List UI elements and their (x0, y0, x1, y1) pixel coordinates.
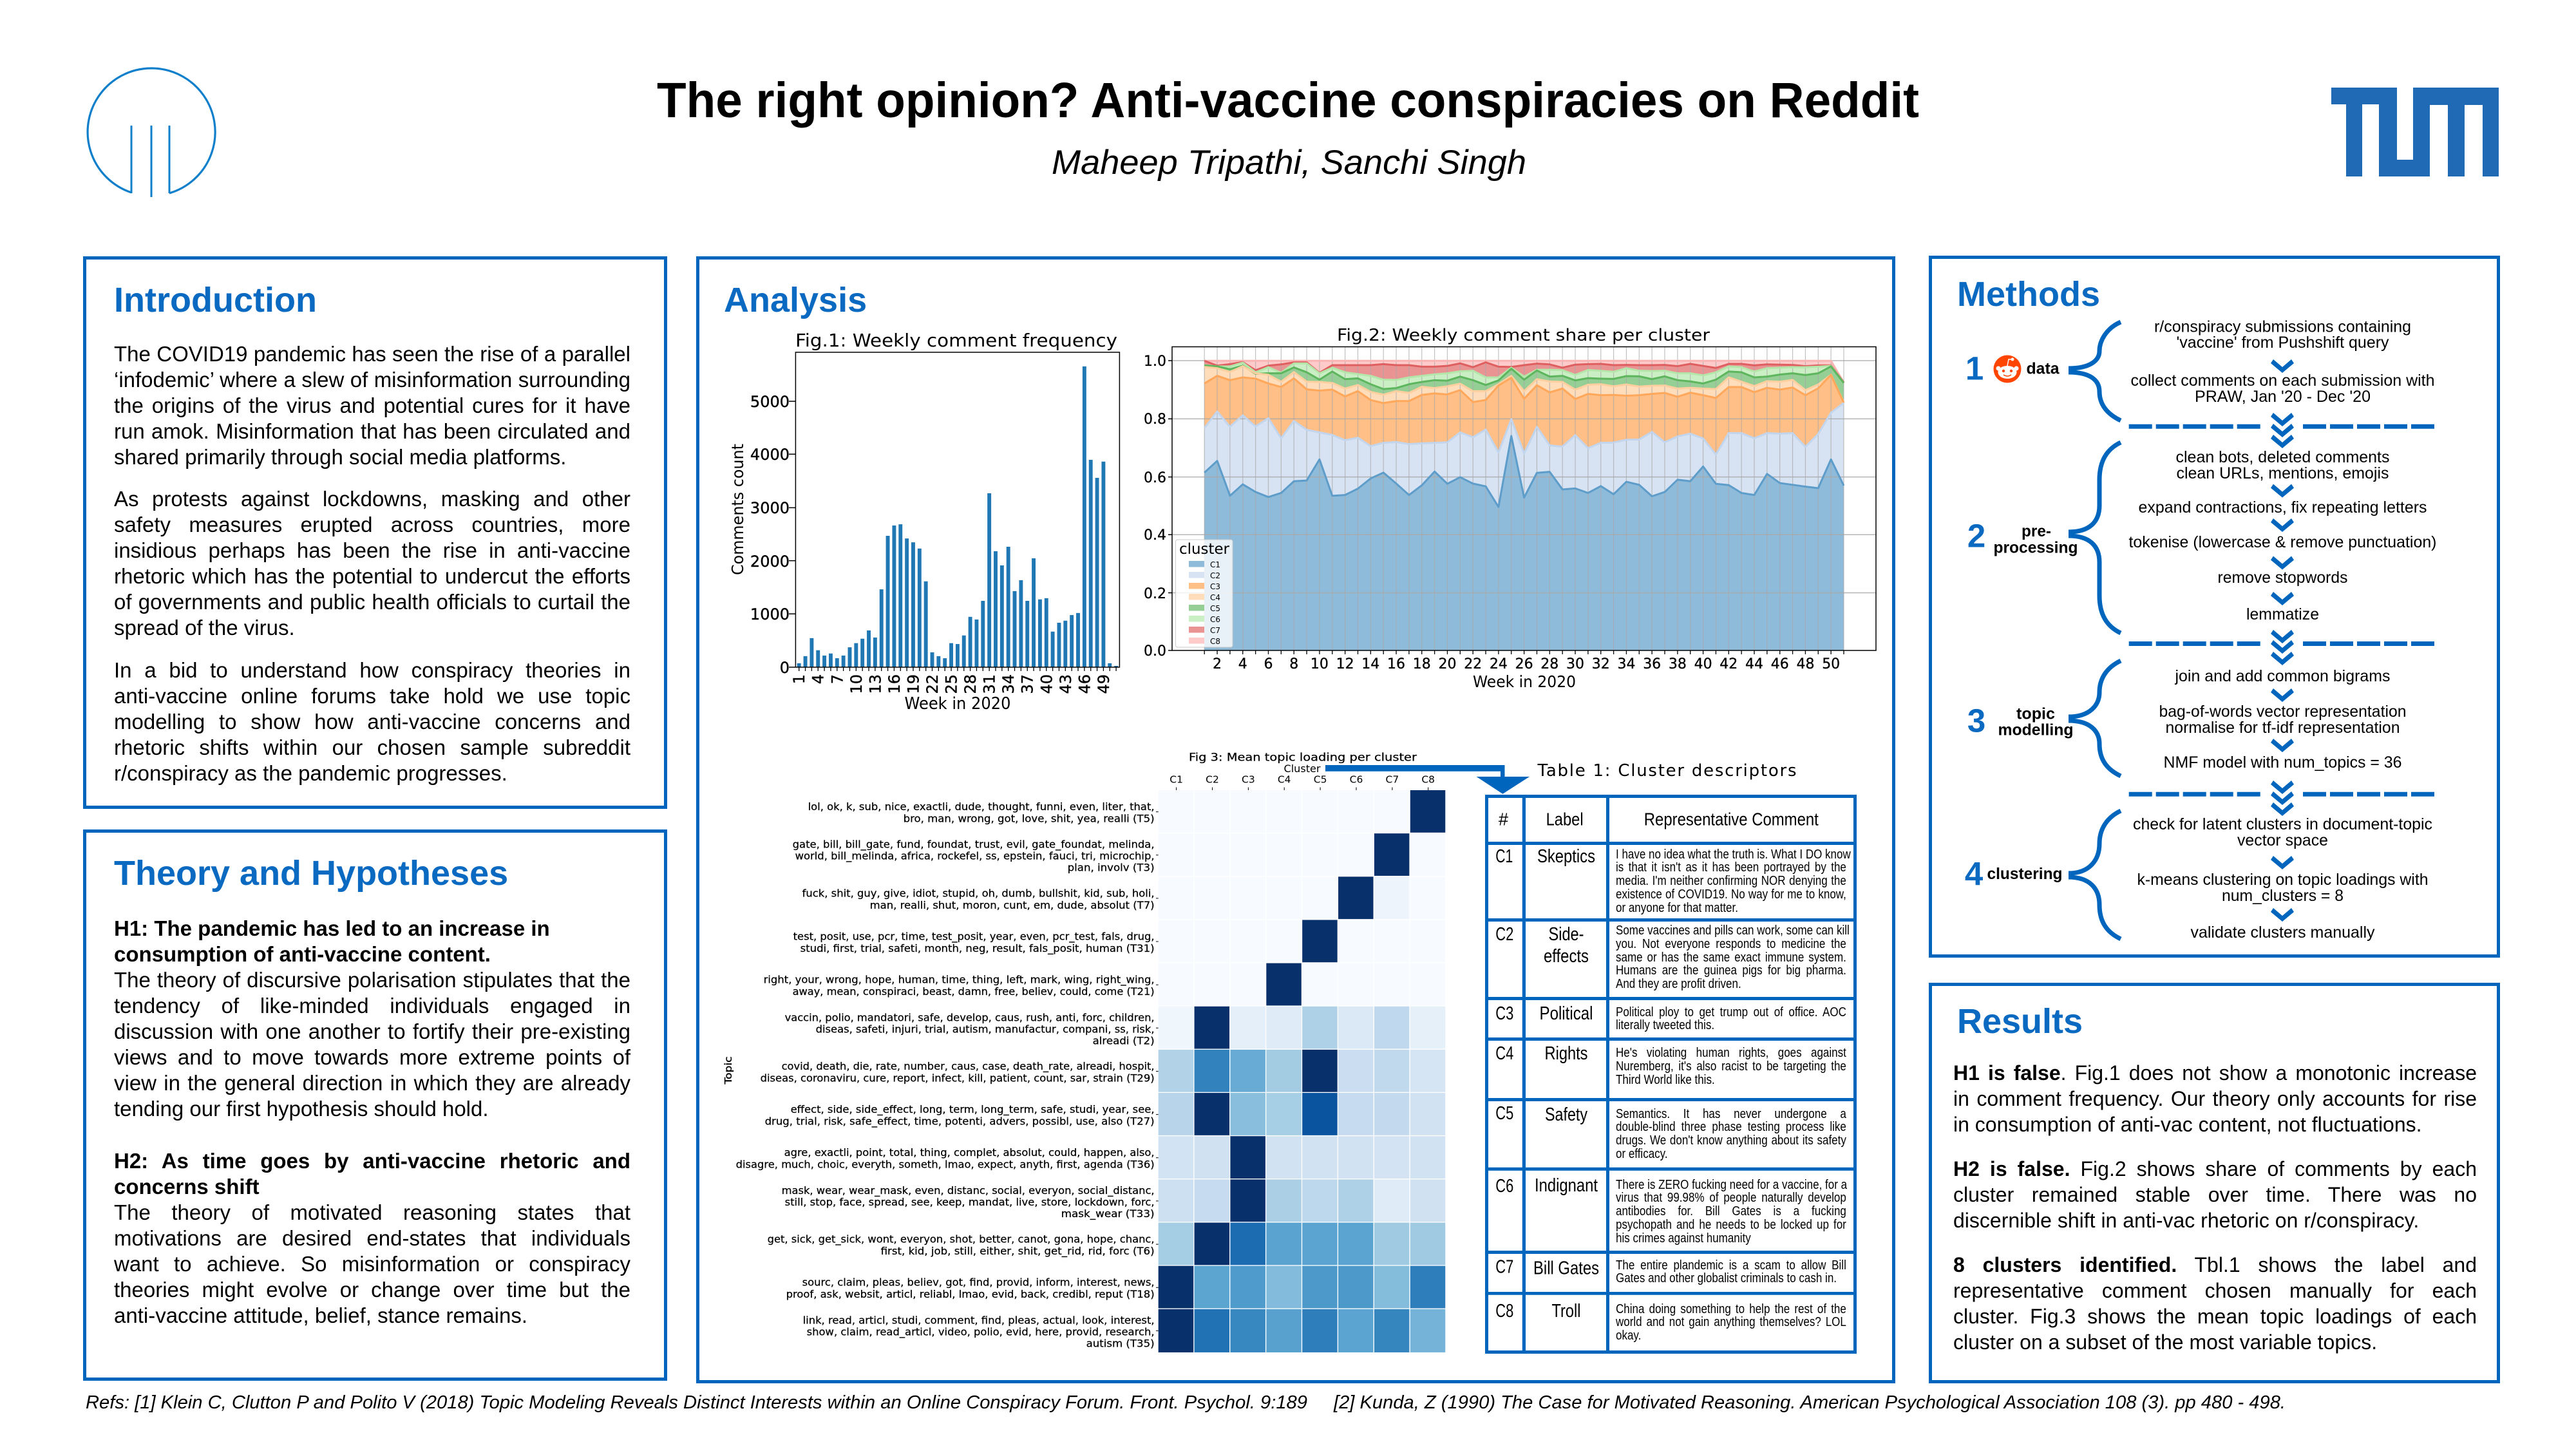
comment C2: Some vaccines and pills can work, some can kill (1615, 923, 1849, 938)
text: intro paragraph 3: modelling to show how anti-vaccine concerns and (114, 710, 630, 734)
chart: figure 2 weekly comment share per cluster: 10 (1311, 656, 1329, 672)
text: hypothesis 1: view in the general direction in which they are already (114, 1071, 630, 1095)
chart: figure 1 weekly comment frequency: 3000 (750, 499, 790, 517)
comment C6: antibodies for. Bill Gates is a fucking (1615, 1204, 1846, 1218)
step descriptions: collect comments on each submission with (2130, 372, 2434, 390)
heatmap topic labels: mask_wear (T33) (1061, 1208, 1155, 1220)
table cluster labels: Indignant (1535, 1175, 1598, 1196)
step labels: pre- (2022, 522, 2051, 540)
step descriptions: check for latent clusters in document-topic (2133, 815, 2432, 833)
legend: clusters: cluster (1179, 541, 1230, 558)
comment C7: Gates and other globalist criminals to cash in. (1615, 1271, 1837, 1285)
step descriptions: 'vaccine' from Pushshift query (2177, 334, 2389, 352)
comment C2: you. Not everyone responds to medicine the (1615, 937, 1846, 951)
table cluster labels: Political (1539, 1003, 1593, 1024)
comment C5: or efficacy. (1615, 1147, 1667, 1161)
step descriptions: r/conspiracy submissions containing (2154, 318, 2411, 336)
comment C5 (1615, 1108, 1846, 1161)
heatmap topic labels: mask, wear, wear_mask, even, distanc, social, everyon, social_distanc, (782, 1184, 1155, 1197)
chart: figure 3 mean topic loading heatmap: C8 (1421, 774, 1435, 786)
text: intro paragraph 1: run amok. Misinformation that has been circulated and (114, 419, 630, 443)
heatmap topic labels: autism (T35) (1086, 1337, 1155, 1349)
text: intro paragraph 2: As protests against lockdowns, masking and other (114, 487, 630, 511)
text: hypothesis 2: theories might evolve or change over time but the (114, 1278, 630, 1302)
text: intro paragraph 3: anti-vaccine online forums take hold we use topic (114, 684, 630, 708)
text: hypothesis 1: discussion with one another to fortify their pre-existing (114, 1019, 630, 1043)
chart: figure 1 weekly comment frequency: 2000 (750, 553, 790, 571)
heatmap topic labels: test, posit, use, pcr, time, test_posit, year, even, pcr_test, fals, drug, (793, 930, 1155, 943)
step labels: clustering (1987, 865, 2062, 883)
comment C5: double-blind three phase testing process like (1615, 1120, 1846, 1134)
heatmap topic labels: plan, involv (T3) (1068, 862, 1155, 874)
logo: TUM (2331, 88, 2499, 176)
text: result H1 (1953, 1060, 2477, 1137)
chart: figure 1 weekly comment frequency: 1 (790, 674, 808, 684)
panel: analysis: 0.0 (1144, 643, 1166, 659)
comment C8 (1615, 1303, 1846, 1343)
table cluster labels: Skeptics (1537, 846, 1595, 867)
text: hypothesis 2: concerns shift (114, 1175, 260, 1198)
step descriptions: validate clusters manually (2191, 923, 2375, 942)
step descriptions: clean bots, deleted comments (2175, 448, 2389, 466)
heatmap topic labels: still, stop, face, spread, see, keep, mandat, live, store, lockdown, forc, (785, 1196, 1155, 1208)
heatmap topic labels: drug, trial, risk, safe_effect, time, potenti, advers, possibl, use, also (T27) (765, 1115, 1155, 1128)
chart: figure 1 weekly comment frequency: 40 (1037, 674, 1056, 694)
heatmap topic labels: fuck, shit, guy, give, idiot, stupid, oh, dumb, bullshit, kid, sub, holi, (802, 887, 1155, 899)
chart: figure 3 mean topic loading heatmap: Fig 3: Mean topic loading per cluster (1189, 752, 1417, 764)
text: intro paragraph 2: insidious perhaps has been the rise in anti-vaccine (114, 538, 630, 562)
step descriptions: bag-of-words vector representation (2159, 703, 2406, 721)
text: intro paragraph 2: safety measures erupted across countries, more (114, 513, 630, 536)
text: hypothesis 1: The theory of discursive polarisation stipulates that the (114, 968, 630, 992)
table cluster labels: Safety (1545, 1104, 1587, 1125)
step numbers: 2 (1967, 518, 1985, 554)
step labels: topic (2016, 705, 2055, 723)
chart: figure 2 weekly comment share per cluster: 4 (1238, 656, 1247, 672)
heatmap topic labels: disagre, much, choic, everyth, someth, lmao, expect, anyth, first, agenda (T36) (736, 1159, 1155, 1171)
step descriptions (2129, 318, 2437, 942)
comment C8: okay. (1615, 1329, 1641, 1343)
comment C1 (1615, 848, 1846, 915)
chart: figure 1 weekly comment frequency: 16 (886, 674, 904, 694)
grid (1172, 361, 1876, 592)
chart: figure 1 weekly comment frequency: 43 (1057, 674, 1075, 694)
comment C3 (1615, 1006, 1846, 1032)
heading: analysis: Analysis (724, 281, 867, 319)
text: result clusters: 8 clusters identified. Tbl.1 shows the label and (1953, 1253, 2477, 1276)
text: result clusters: representative comment chosen manually for each (1953, 1279, 2477, 1302)
chart: figure 1 weekly comment frequency: 46 (1075, 674, 1094, 694)
panel: theory and hypotheses (83, 829, 667, 1381)
chart: figure 2 weekly comment share per cluster: 6 (1264, 656, 1273, 672)
table cluster ids: C3 (1495, 1003, 1513, 1024)
text: result H2: cluster remained stable over time. There was no (1953, 1183, 2477, 1206)
chart: figure 2 weekly comment share per cluster: 2 (1213, 656, 1222, 672)
chart: figure 3 mean topic loading heatmap: Cluster (1284, 762, 1321, 775)
chart: figure 2 weekly comment share per cluster: 26 (1515, 656, 1533, 672)
legend: clusters (1176, 540, 1233, 647)
text: intro paragraph 1 (114, 342, 630, 469)
text: intro paragraph 3 (114, 658, 630, 785)
chevron arrows (2271, 359, 2294, 922)
text: intro paragraph 1: The COVID19 pandemic has seen the rise of a parallel (114, 342, 630, 366)
legend: clusters: C4 (1210, 593, 1220, 602)
step labels (1987, 360, 2078, 883)
chart: figure 2 weekly comment share per cluster: 12 (1336, 656, 1354, 672)
comment C2: Humans are the guinea pigs for big pharma. (1615, 963, 1846, 978)
panel: analysis: 0.4 (1144, 527, 1166, 544)
heatmap topic labels: vaccin, polio, mandatori, safe, develop, caus, rush, anti, forc, children, (785, 1011, 1155, 1023)
comment C4: Third World like this. (1615, 1073, 1714, 1087)
chart: figure 3 mean topic loading heatmap: C5 (1314, 774, 1327, 786)
legend: clusters: C5 (1210, 604, 1220, 613)
heatmap topic labels: first, kid, job, still, either, shit, get_rid, rid, forc (T6) (881, 1245, 1155, 1258)
comment C1: is that it isn't as it has been portrayed by the (1615, 860, 1846, 875)
chart: figure 3 mean topic loading heatmap: Topic (723, 1056, 734, 1085)
heading: methods: Methods (1957, 275, 2100, 314)
heatmap topic labels: world, bill_melinda, africa, rockefel, ss, epstein, fauci, tri, microchip, (795, 850, 1155, 863)
title: The right opinion? Anti-vaccine conspiracies on Reddit (657, 73, 1919, 128)
comment C6: his crimes against humanity (1615, 1231, 1750, 1245)
chart: figure 2 weekly comment share per cluster: 34 (1618, 656, 1636, 672)
text: hypothesis 2: want to achieve. So misinformation or conspiracy (114, 1252, 630, 1276)
heatmap topic labels: bro, man, wrong, got, love, shit, yea, realli (T5) (904, 813, 1155, 824)
text: intro paragraph 1: ‘infodemic’ where a slew of misinformation surrounding (114, 368, 630, 392)
legend: clusters: C1 (1210, 560, 1220, 569)
chart: figure 2 weekly comment share per cluster: Week in 2020 (1473, 672, 1576, 691)
text: result H1: in comment frequency. Our theory only accounts for rise (1953, 1087, 2477, 1110)
table cluster labels (1533, 846, 1599, 1321)
comment C3: literally tweeted this. (1615, 1018, 1714, 1032)
step descriptions: lemmatize (2246, 605, 2319, 623)
heatmap topic labels: sourc, claim, pleas, believ, got, find, provid, inform, interest, news, (802, 1276, 1155, 1289)
icon: reddit (1994, 355, 2021, 383)
panel: analysis: 1.0 (1144, 354, 1166, 370)
table cluster ids: C2 (1495, 924, 1513, 945)
text: result clusters: cluster on a subset of the most variable topics. (1953, 1331, 2377, 1354)
text: hypothesis 1: H1: The pandemic has led to an increase in (114, 916, 550, 940)
chart: figure 2 weekly comment share per cluster: 16 (1387, 656, 1405, 672)
text: intro paragraph 3: In a bid to understand how conspiracy theories in (114, 658, 630, 682)
table cluster ids: C6 (1495, 1176, 1513, 1197)
comment C1: or anyone for that matter. (1615, 901, 1738, 915)
table cluster labels: effects (1544, 946, 1589, 967)
comment C4 (1615, 1046, 1846, 1087)
heatmap topic labels: man, realli, shut, moron, cunt, em, dude, absolut (T7) (870, 899, 1155, 911)
heatmap topic labels: diseas, coronaviru, cure, report, infect, kill, patient, count, sar, strain (T29) (761, 1072, 1155, 1084)
chart: figure 1 weekly comment frequency: 0 (780, 659, 790, 677)
heatmap topic labels: effect, side, side_effect, long, term, long_term, safe, studi, year, see, (791, 1103, 1155, 1116)
text: hypothesis 1: tending our first hypothesis should hold. (114, 1097, 489, 1121)
chart: figure 3 mean topic loading heatmap: C2 (1206, 774, 1219, 786)
comment C1: I have no idea what the truth is. What I DO know (1615, 848, 1850, 862)
authors: Maheep Tripathi, Sanchi Singh (1052, 144, 1526, 182)
table cluster ids: C8 (1495, 1301, 1513, 1321)
legend: clusters: C7 (1210, 626, 1220, 635)
table header: Representative Comment (1644, 810, 1819, 829)
panel: analysis (696, 256, 1895, 1383)
comment C2: And they are profit driven. (1615, 977, 1741, 991)
step labels: modelling (1998, 721, 2074, 739)
heading: theory and hypotheses: Theory and Hypotheses (114, 854, 508, 893)
chart: figure 2 weekly comment share per cluster: 40 (1694, 656, 1712, 672)
text: result H1: H1 is false. Fig.1 does not show a monotonic increase (1953, 1061, 2477, 1084)
step descriptions: num_clusters = 8 (2222, 887, 2344, 905)
chart: figure 2 weekly comment share per cluster: 50 (1822, 656, 1840, 672)
chart: figure 1 weekly comment frequency: 7 (828, 674, 846, 684)
chart: figure 2 weekly comment share per cluster: 38 (1669, 656, 1687, 672)
comment C2: same or has the same exact immune system. (1615, 951, 1846, 965)
table cluster ids: C7 (1495, 1257, 1513, 1278)
chart: figure 1 weekly comment frequency: 19 (904, 674, 922, 694)
chart: figure 1 weekly comment frequency: 4 (810, 674, 828, 684)
chart: figure 2 weekly comment share per cluster: 44 (1745, 656, 1763, 672)
heading: introduction: Introduction (114, 281, 317, 319)
chart: figure 3 mean topic loading heatmap: C3 (1242, 774, 1255, 786)
text: result H2: discernible shift in anti-vac rhetoric on r/conspiracy. (1953, 1209, 2419, 1232)
text: intro paragraph 2 (114, 487, 630, 639)
comment C6: psychopath and he needs to be locked up for (1615, 1218, 1846, 1232)
chart: figure 2 weekly comment share per cluster: 18 (1413, 656, 1431, 672)
text: result clusters: cluster. Fig.3 shows the mean topic loadings of each (1953, 1305, 2477, 1328)
text: intro paragraph 3: r/conspiracy as the pandemic progresses. (114, 761, 507, 785)
heatmap topic labels (736, 800, 1155, 1349)
comment C5: Semantics. It has never undergone a (1615, 1107, 1846, 1121)
chart: figure 1 weekly comment frequency: 49 (1095, 674, 1113, 694)
table cluster ids: C5 (1495, 1103, 1513, 1124)
chart: figure 1 weekly comment frequency: 37 (1019, 674, 1037, 694)
table cluster labels: Rights (1544, 1043, 1588, 1064)
chart: figure 3 mean topic loading heatmap: C7 (1386, 774, 1399, 786)
table cluster labels: Side- (1548, 924, 1584, 945)
heatmap cells (1159, 790, 1445, 1352)
text: hypothesis 2 (114, 1149, 630, 1327)
legend: clusters: C6 (1210, 615, 1220, 624)
text: intro paragraph 2: of governments and public health officials to curtail the (114, 590, 630, 614)
comment C7 (1615, 1259, 1846, 1285)
step numbers: 1 (1965, 350, 1984, 387)
chart: figure 2 weekly comment share per cluster: 46 (1771, 656, 1789, 672)
step descriptions: k-means clustering on topic loadings with (2137, 871, 2428, 889)
comment C1: existence of COVID19. No way for me to know, (1615, 887, 1846, 902)
chart: figure 1 weekly comment frequency: Week in 2020 (904, 694, 1011, 714)
heatmap topic labels: agre, exactli, point, total, thing, complet, absolut, could, happen, also, (784, 1146, 1155, 1159)
chart: figure 2 weekly comment share per cluster: 24 (1490, 656, 1508, 672)
chart: figure 2 weekly comment share per cluster: 48 (1797, 656, 1815, 672)
comment C6: virus that 99.98% of people naturally develop (1615, 1191, 1846, 1205)
text: intro paragraph 2: rhetoric which has the potential to undercut the efforts (114, 564, 630, 588)
chart: figure 2 weekly comment share per cluster: 8 (1289, 656, 1298, 672)
chart: figure 1 weekly comment frequency: 4000 (750, 446, 790, 464)
step descriptions: PRAW, Jan '20 - Dec '20 (2195, 388, 2371, 406)
chart: figure 2 weekly comment share per cluster (1144, 326, 1877, 691)
chart: figure 1 weekly comment frequency: 34 (999, 674, 1018, 694)
comment C6 (1615, 1179, 1846, 1245)
braces (2069, 322, 2121, 939)
table header: # (1499, 810, 1508, 829)
chart: figure 1 weekly comment frequency: 5000 (750, 393, 790, 411)
text: result H1: in consumption of anti-vac content, not fluctuations. (1953, 1113, 2422, 1136)
step descriptions: remove stopwords (2218, 569, 2348, 587)
text: hypothesis 1: consumption of anti-vaccine content. (114, 942, 491, 966)
step descriptions: clean URLs, mentions, emojis (2177, 464, 2389, 482)
step numbers: 4 (1965, 855, 1984, 892)
step descriptions: vector space (2237, 831, 2328, 849)
table cluster ids (1495, 846, 1513, 1321)
text: hypothesis 1 (114, 916, 631, 1121)
chart: figure 3 mean topic loading heatmap: C4 (1278, 774, 1291, 786)
chart: figure 2 weekly comment share per cluster: 22 (1464, 656, 1482, 672)
text: intro paragraph 1: the origins of the virus and potential cures for it have (114, 393, 630, 417)
step numbers (1965, 350, 1985, 892)
chart: figure 2 weekly comment share per cluster: 36 (1643, 656, 1661, 672)
table cluster labels: Bill Gates (1533, 1258, 1599, 1278)
legend: clusters: C3 (1210, 582, 1220, 591)
heading: results: Results (1957, 1002, 2083, 1041)
panel: introduction (83, 256, 667, 809)
chart: figure 3 mean topic loading heatmap: C6 (1350, 774, 1363, 786)
text: result H2: H2 is false. Fig.2 shows share of comments by each (1953, 1157, 2477, 1180)
chart: figure 1 weekly comment frequency: 1000 (750, 605, 790, 623)
bars (797, 366, 1118, 667)
panel: analysis: 0.2 (1144, 586, 1166, 602)
chart: figure 1 weekly comment frequency: Fig.1: Weekly comment frequency (795, 330, 1117, 351)
comment C6: There is ZERO fucking need for a vaccine, for a (1615, 1178, 1847, 1192)
heatmap topic labels: gate, bill, bill_gate, fund, foundat, trust, evil, gate_foundat, melinda, (793, 838, 1155, 851)
comment C2 (1615, 924, 1846, 991)
table header (1499, 810, 1819, 829)
step numbers: 3 (1967, 703, 1985, 739)
heatmap topic labels: link, read, articl, studi, comment, find, pleas, actual, look, interest, (803, 1314, 1155, 1326)
panel: analysis: 0.8 (1144, 412, 1166, 428)
text: intro paragraph 2: spread of the virus. (114, 616, 295, 639)
heatmap topic labels: get, sick, get_sick, wont, everyon, shot, better, canot, gona, hope, chanc, (768, 1233, 1155, 1245)
table: cluster descriptors (1485, 795, 1857, 1354)
references: [2] Kunda, Z (1990) The Case for Motivated Reasoning. American Psychological Association 108 (3). pp 480 - 498. (1333, 1392, 2286, 1413)
text: hypothesis 1: views and to move towards more extreme points of (114, 1045, 630, 1069)
references: Refs: [1] Klein C, Clutton P and Polito V (2018) Topic Modeling Reveals Distinct Interests within an Online Conspiracy Forum. Front. Psychol. 9:189 (86, 1392, 1307, 1413)
comment C8: China doing something to help the rest of the (1615, 1302, 1846, 1316)
table cluster ids: C1 (1495, 846, 1513, 867)
chart: figure 1 weekly comment frequency: 31 (981, 674, 999, 694)
heatmap topic labels: studi, first, trial, safeti, month, neg, result, fals_posit, human (T31) (800, 942, 1155, 955)
heatmap topic labels: covid, death, die, rate, number, caus, case, death_rate, alreadi, hospit, (782, 1060, 1155, 1073)
references (80, 1388, 2296, 1417)
table cluster ids: C4 (1495, 1043, 1513, 1064)
step descriptions: tokenise (lowercase & remove punctuation) (2129, 533, 2437, 551)
heatmap topic labels: away, mean, conspiraci, beast, damn, free, believ, could, come (T21) (793, 985, 1155, 998)
chart: figure 2 weekly comment share per cluster: 14 (1361, 656, 1379, 672)
text: intro paragraph 3: rhetoric shifts within our chosen sample subreddit (114, 735, 630, 759)
table title: Table 1: Cluster descriptors (1537, 761, 1797, 781)
chart: figure 1 weekly comment frequency: 10 (848, 674, 866, 694)
legend: clusters: C2 (1210, 571, 1220, 580)
panel: analysis: 0.6 (1144, 470, 1166, 486)
comment C7: The entire plandemic is a scam to allow Bill (1615, 1258, 1846, 1273)
step labels: processing (1994, 539, 2078, 557)
step descriptions: NMF model with num_topics = 36 (2164, 753, 2402, 772)
legend: clusters: C8 (1210, 637, 1220, 646)
chart: figure 1 weekly comment frequency: 28 (961, 674, 980, 694)
flow diagram: methods pipeline (1929, 256, 2500, 958)
step descriptions: expand contractions, fix repeating letters (2138, 498, 2427, 516)
panel: results (1929, 983, 2500, 1383)
chart: figure 2 weekly comment share per cluster: Fig.2: Weekly comment share per cluster (1337, 326, 1710, 345)
chart: figure 2 weekly comment share per cluster: 42 (1719, 656, 1738, 672)
comment C1: media. I'm neither confirming NOR denying the (1615, 874, 1846, 888)
chart: figure 1 weekly comment frequency: Comments count (728, 444, 747, 575)
logo: university ring (86, 67, 216, 197)
chart: figure 2 weekly comment share per cluster: 32 (1592, 656, 1610, 672)
chart: figure 2 weekly comment share per cluster: 20 (1439, 656, 1457, 672)
text: hypothesis 2: motivations are desired end-states that individuals (114, 1226, 630, 1250)
chart: figure 3 mean topic loading heatmap (723, 752, 1445, 1352)
text: hypothesis 1: tendency of like-minded individuals engaged in (114, 994, 630, 1018)
comment C4: He's violating human rights, goes against (1615, 1046, 1846, 1060)
chart: figure 3 mean topic loading heatmap: C1 (1170, 774, 1183, 786)
heatmap topic labels: alreadi (T2) (1093, 1034, 1155, 1046)
text: hypothesis 2: H2: As time goes by anti-vaccine rhetoric and (114, 1149, 630, 1173)
heatmap topic labels: lol, ok, k, sub, nice, exactli, dude, thought, funni, even, liter, that, (808, 800, 1155, 813)
text: hypothesis 2: The theory of motivated reasoning states that (114, 1200, 630, 1224)
chart: figure 1 weekly comment frequency: 13 (866, 674, 884, 694)
panel: methods (1929, 256, 2500, 958)
area boundary lines (1204, 361, 1844, 507)
comment C8: world and not gain anything themselves? LOL (1615, 1315, 1846, 1329)
chart: figure 2 weekly comment share per cluster: 30 (1566, 656, 1584, 672)
heatmap topic labels: right, your, wrong, hope, human, time, thing, left, mark, wing, right_wing, (764, 974, 1155, 987)
chart: figure 2 weekly comment share per cluster: 28 (1540, 656, 1558, 672)
heatmap topic labels: proof, ask, websit, articl, reliabl, lmao, evid, back, credibl, reput (T18) (786, 1288, 1155, 1300)
chart: figure 1 weekly comment frequency: 25 (943, 674, 961, 694)
step labels: data (2026, 360, 2060, 378)
comment C3: Political ploy to get trump out of office. AOC (1615, 1005, 1846, 1019)
heatmap topic labels: diseas, safeti, injuri, trial, autism, manufactur, compani, ss, risk, (816, 1023, 1155, 1035)
chart: figure 1 weekly comment frequency (728, 330, 1121, 714)
comment C4: Nuremberg, it's also racist to be targeting the (1615, 1059, 1846, 1074)
stacked areas (1204, 361, 1844, 650)
step descriptions: join and add common bigrams (2175, 667, 2391, 685)
text: intro paragraph 1: shared primarily through social media platforms. (114, 445, 566, 469)
chart: figure 1 weekly comment frequency: 22 (923, 674, 942, 694)
heatmap topic labels: show, claim, read_articl, video, polio, evid, here, provid, research, (807, 1325, 1155, 1338)
text: result H2 (1953, 1156, 2477, 1233)
arrow: heatmap to table (1325, 765, 1530, 794)
table header: Label (1546, 810, 1584, 829)
comment C5: drugs. We don't know anything about its safety (1615, 1133, 1846, 1148)
text: hypothesis 2: anti-vaccine attitude, belief, stance remains. (114, 1303, 527, 1327)
table cluster labels: Troll (1552, 1301, 1580, 1321)
text: result clusters (1953, 1252, 2477, 1355)
step descriptions: normalise for tf-idf representation (2165, 719, 2400, 737)
